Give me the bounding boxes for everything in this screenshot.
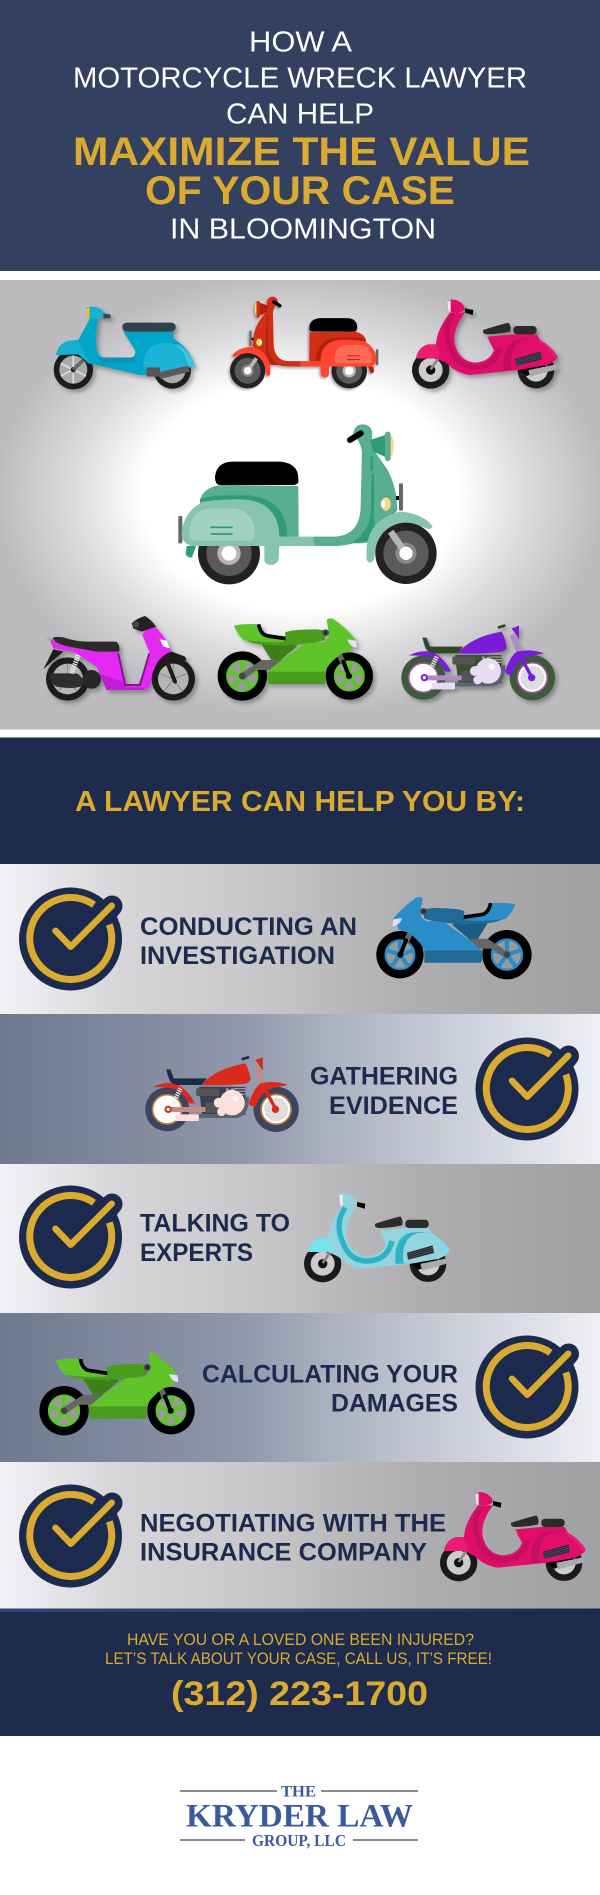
icon: check badge [476,1038,578,1140]
text: have you or a loved one been injured: HAVE YOU OR A LOVED ONE BEEN INJURED? [127,1630,474,1649]
text: gathering evidence: EVIDENCE [329,1092,458,1120]
icon: red scooter [230,297,378,389]
panel: conducting an investigation [0,864,600,1014]
header panel [0,0,600,271]
text: conducting an investigation: CONDUCTING AN [140,913,357,941]
panel: calculating your damages [0,1313,600,1462]
title: maximize the value: MAXIMIZE THE VALUE [73,130,530,174]
icon: cyan scooter [54,307,195,389]
icon: green vintage scooter [178,424,437,584]
text: conducting an investigation: INVESTIGATION [140,942,335,970]
text: negotiating with the insurance company: INSURANCE COMPANY [140,1539,427,1567]
panel: talking to experts [0,1164,600,1313]
text: negotiating with the insurance company [140,1510,446,1567]
title: how a: HOW A [249,26,352,58]
text: gathering evidence [310,1063,458,1120]
icon: red cruiser [145,1057,299,1132]
icon: check badge [19,1186,122,1288]
logo: the kryder law group: THE [281,1784,316,1801]
icon: check badge [19,1484,122,1588]
icon: green sport bike [39,1353,195,1435]
icon: magenta scooter [43,616,195,701]
icon: check badge [19,888,122,990]
text: gathering evidence: GATHERING [310,1063,458,1091]
text: calculating your damages [202,1361,458,1418]
text: talking to experts: TALKING TO [140,1210,290,1238]
title: can help: CAN HELP [226,98,374,130]
panel: negotiating with the insurance company [0,1462,600,1608]
text: phone number: (312) 223-1700 [171,1675,428,1713]
icon: pink scooter [440,1492,586,1581]
text: talking to experts [140,1210,290,1267]
heading text: A LAWYER CAN HELP YOU BY: [75,786,525,818]
logo: the kryder law group: KRYDER LAW [186,1799,413,1835]
heading panel: a lawyer can help you by [0,738,600,864]
text: calculating your damages: DAMAGES [331,1390,458,1418]
icon: check badge [476,1336,578,1438]
title: in bloomington: IN BLOOMINGTON [170,213,436,245]
icon: purple cruiser [401,626,555,700]
text: negotiating with the insurance company: NEGOTIATING WITH THE [140,1510,446,1538]
text: talking to experts: EXPERTS [140,1239,253,1267]
text: conducting an investigation [140,913,357,970]
panel: gathering evidence [0,1014,600,1164]
icon: blue sport bike [376,897,532,979]
text: let's talk about your case: LET’S TALK ABOUT YOUR CASE, CALL US, IT’S FREE! [105,1649,492,1668]
icon: green sport bike [218,618,373,701]
logo: the kryder law group [180,1784,418,1850]
icon: pink scooter [412,299,558,389]
title: of your case: OF YOUR CASE [145,169,455,213]
title: motorcycle wreck lawyer: MOTORCYCLE WRECK LAWYER [73,62,527,94]
logo: the kryder law group: GROUP, LLC [252,1831,346,1850]
text: calculating your damages: CALCULATING YOUR [202,1361,458,1389]
panel: motorcycle line-up [0,280,600,730]
footer call to action [0,1608,600,1736]
icon: light teal scooter [304,1193,450,1282]
